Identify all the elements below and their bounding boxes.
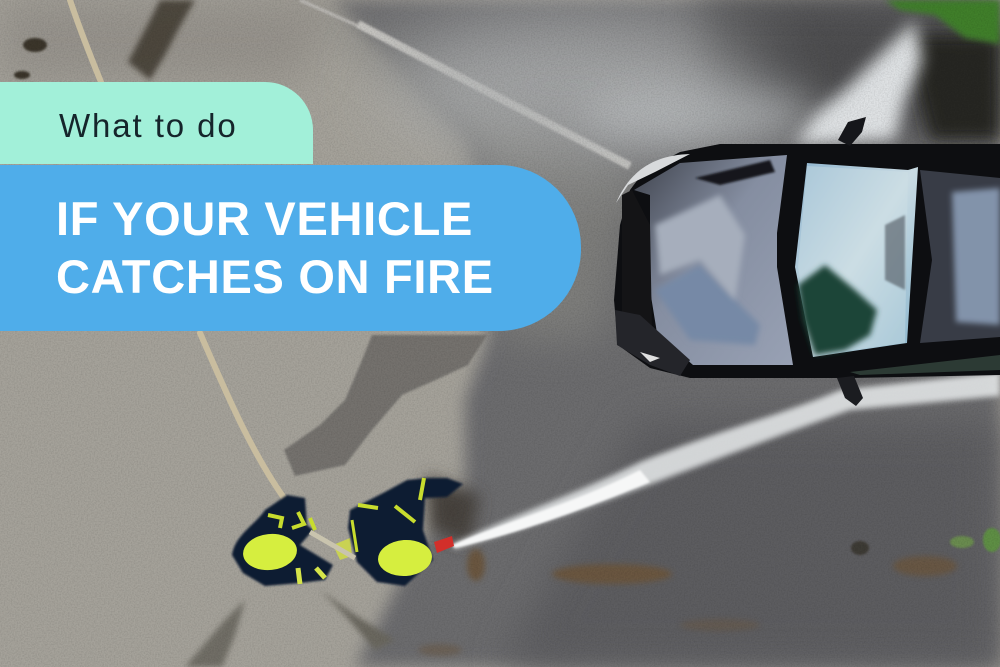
firefighter right [310, 478, 463, 586]
debris on road [418, 541, 957, 656]
smoke [380, 15, 922, 155]
title [56, 192, 494, 303]
window strip [850, 355, 1000, 375]
title: CATCHES ON FIRE [56, 250, 494, 303]
wet ground under firefighters [425, 475, 480, 545]
water spray [452, 372, 1000, 549]
sunroof reflection [952, 188, 1000, 325]
tree reflection on windshield [798, 265, 877, 355]
pill: main title [0, 165, 581, 331]
stains on concrete [14, 0, 395, 667]
car body [614, 144, 1000, 378]
windshield [795, 163, 918, 357]
title: IF YOUR VEHICLE [56, 192, 473, 245]
wet patch on road [284, 335, 487, 476]
subtitle text: What to do [59, 107, 238, 144]
mirrors [838, 117, 866, 146]
foliage [885, 0, 1000, 552]
bumper wreck [615, 310, 690, 376]
fire hose [70, 0, 284, 498]
hood edge highlight [616, 154, 690, 203]
hood [634, 155, 793, 365]
roof [920, 170, 1000, 343]
road markings [300, 0, 630, 166]
pill: What to do [0, 82, 313, 164]
grille [622, 190, 652, 330]
car [614, 117, 1000, 406]
firefighter left [232, 495, 352, 586]
